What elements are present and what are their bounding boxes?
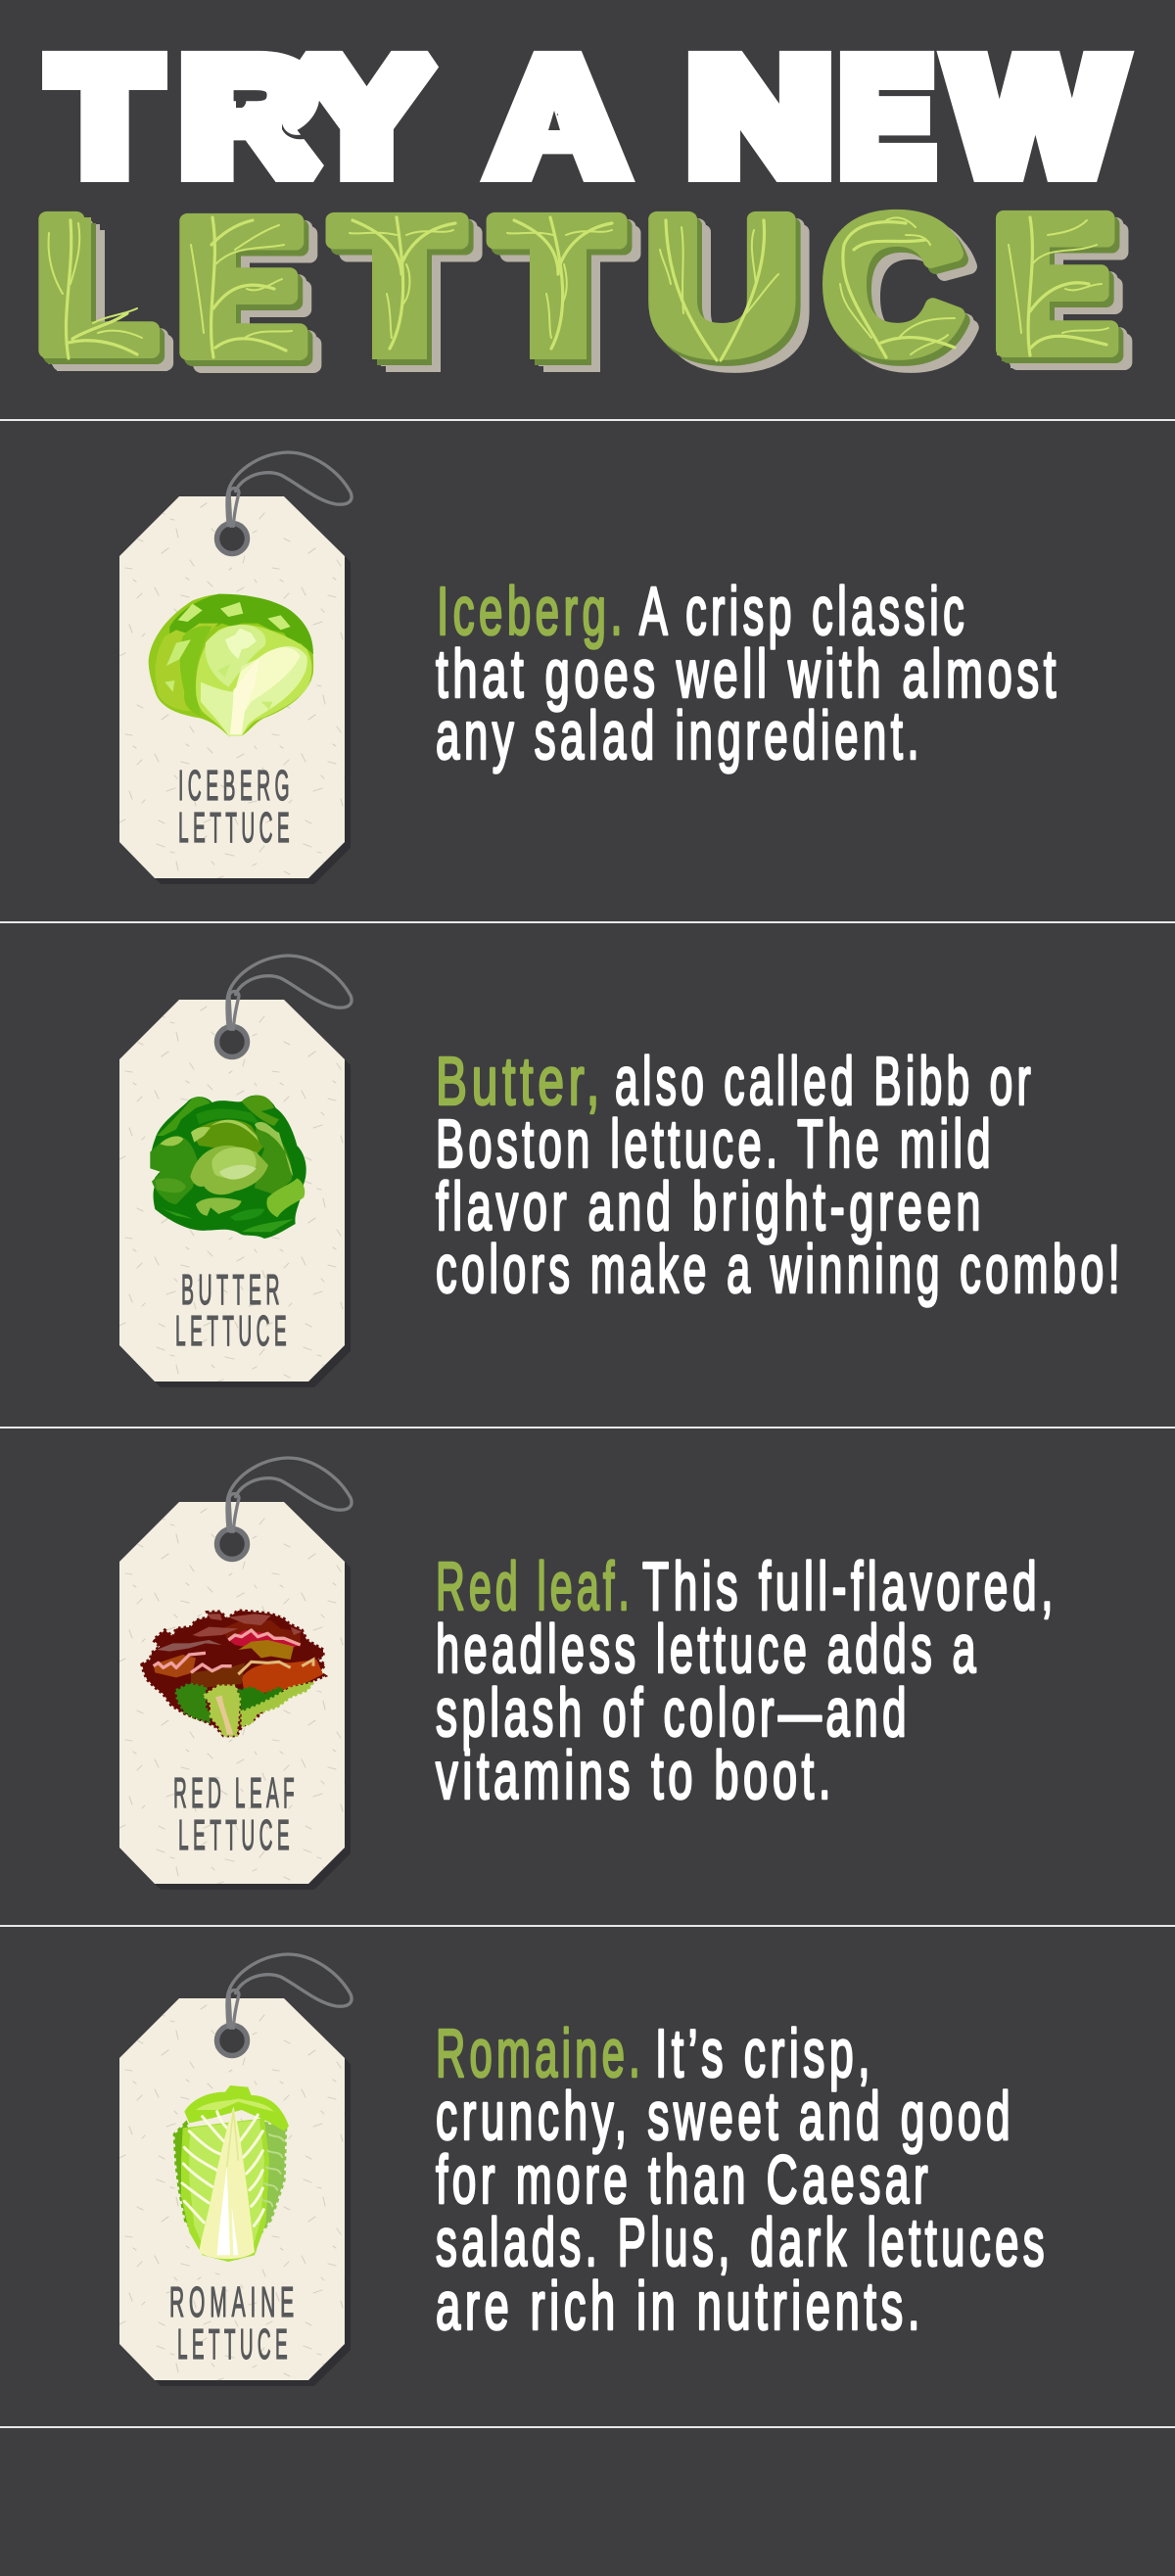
divider	[0, 1427, 1175, 1429]
romaine description: Romaine.	[436, 2015, 644, 2091]
butter tag: BUTTER	[181, 1267, 284, 1314]
title: TRY A NEW: W	[952, 26, 1119, 206]
red leaf tag: LETTUCE	[178, 1812, 294, 1859]
iceberg description	[436, 573, 1060, 773]
title: TRY A NEW: R	[181, 26, 317, 206]
romaine tag: LETTUCE	[177, 2321, 292, 2368]
icon: iceberg lettuce	[149, 594, 313, 736]
title: TRY A NEW: Y	[303, 26, 431, 206]
tag label	[178, 763, 294, 852]
iceberg tag: ICEBERG	[178, 763, 294, 810]
romaine tag: ROMAINE	[169, 2279, 299, 2326]
divider	[0, 1925, 1175, 1927]
red leaf description	[436, 1548, 1058, 1813]
red leaf description: vitamins to boot.	[436, 1737, 835, 1813]
iceberg tag: LETTUCE	[178, 805, 294, 852]
divider	[0, 419, 1175, 421]
tag label	[175, 1267, 291, 1355]
red leaf tag	[119, 1458, 352, 1890]
panel: romaine	[119, 1954, 1049, 2386]
iceberg description: A crisp classic	[639, 573, 968, 649]
title: LETTUCE in leaf lettering: E	[174, 180, 307, 394]
butter description: Butter,	[436, 1043, 604, 1119]
title: LETTUCE in leaf lettering: T	[493, 179, 621, 393]
title: TRY A NEW: E	[840, 26, 933, 206]
butter tag	[119, 956, 352, 1387]
butter description	[436, 1043, 1124, 1307]
icon: romaine lettuce	[174, 2085, 289, 2262]
red leaf tag: RED LEAF	[173, 1770, 299, 1817]
romaine description: are rich in nutrients.	[436, 2268, 924, 2344]
panel: red leaf	[119, 1458, 1058, 1890]
panel: iceberg	[119, 452, 1060, 884]
leaf veins	[49, 217, 1108, 360]
divider	[0, 2426, 1175, 2428]
butter tag: LETTUCE	[175, 1308, 291, 1355]
title: LETTUCE in leaf lettering: C	[822, 178, 963, 392]
title: LETTUCE in leaf lettering: L	[33, 178, 158, 392]
title: LETTUCE in leaf lettering: T	[332, 179, 462, 393]
red leaf description: splash of color—and	[436, 1674, 911, 1751]
tag label	[169, 2279, 299, 2368]
divider	[0, 921, 1175, 923]
icon: butter lettuce	[150, 1096, 306, 1239]
icon: red leaf lettuce	[142, 1611, 325, 1736]
title: LETTUCE in leaf lettering: E	[991, 177, 1118, 391]
iceberg tag	[119, 452, 352, 884]
title: TRY A NEW	[52, 26, 1119, 206]
iceberg description: Iceberg.	[437, 573, 627, 649]
romaine description: It’s crisp,	[655, 2015, 874, 2091]
title: LETTUCE in leaf lettering	[33, 177, 1118, 394]
panel: butter	[119, 956, 1124, 1387]
romaine description	[436, 2015, 1049, 2344]
title: LETTUCE in leaf lettering: U	[644, 178, 800, 392]
romaine tag	[119, 1954, 352, 2386]
tag label	[173, 1770, 299, 1859]
title: TRY A NEW: T	[52, 26, 158, 206]
title: TRY A NEW: A	[493, 26, 623, 206]
red leaf description: Red leaf.	[436, 1548, 634, 1624]
title: TRY A NEW: N	[688, 26, 831, 206]
